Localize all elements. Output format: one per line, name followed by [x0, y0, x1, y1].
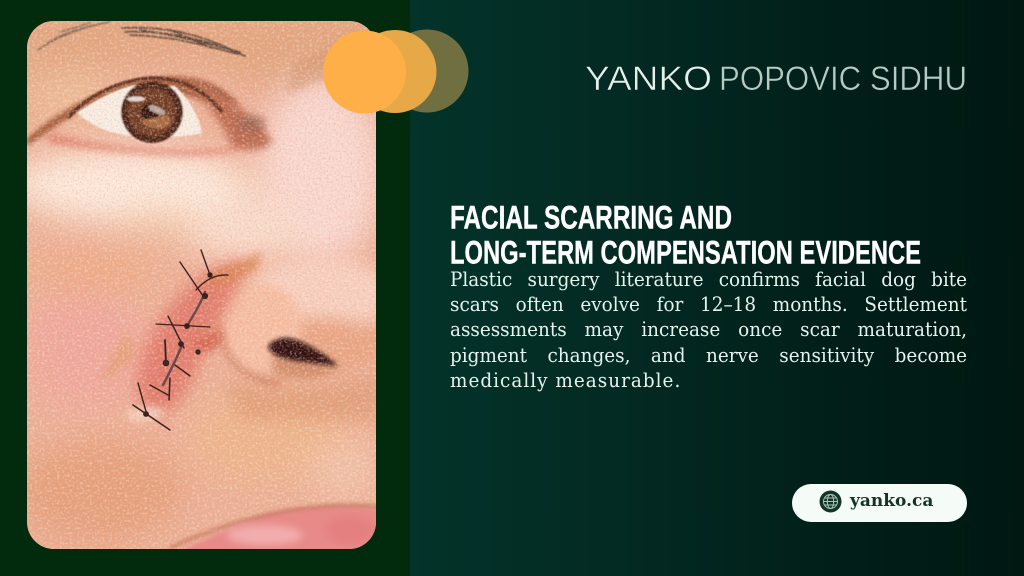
upper eyelid and crease [27, 76, 240, 146]
skin texture [27, 21, 376, 549]
lips [168, 501, 376, 549]
skin tone zones [10, 10, 382, 540]
nostril [268, 338, 338, 366]
body paragraph: assessments may increase once scar maturation, [450, 317, 967, 341]
eyebrow [38, 22, 245, 56]
eye [68, 78, 222, 143]
body paragraph: pigment changes, and nerve sensitivity become [450, 343, 967, 367]
body paragraph [450, 267, 967, 392]
website pill: yanko.ca [850, 491, 933, 511]
nose [225, 257, 390, 420]
body paragraph: Plastic surgery literature confirms facial dog bite [450, 267, 967, 291]
heading: FACIAL SCARRING AND [450, 200, 732, 236]
body paragraph: scars often evolve for 12–18 months. Settlement [450, 292, 967, 316]
sutures [133, 250, 228, 430]
logo: Yanko Popovic Sidhu: YANKO [585, 60, 712, 98]
logo: Yanko Popovic Sidhu: POPOVIC SIDHU [719, 60, 967, 98]
wound redness [137, 258, 245, 417]
website pill [792, 484, 967, 522]
icon: globe [820, 490, 842, 512]
photo: close-up of a stitched facial wound [27, 21, 376, 549]
panel: dark green left band [0, 0, 410, 576]
body paragraph: medically measurable. [450, 368, 681, 392]
